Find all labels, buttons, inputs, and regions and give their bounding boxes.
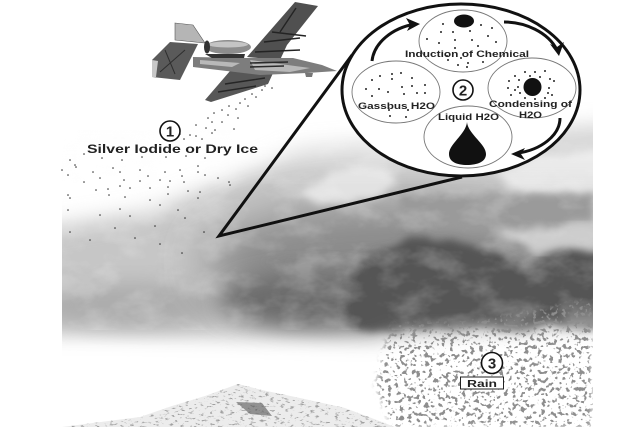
label: Condensing of [489, 99, 573, 110]
mountain [64, 384, 394, 427]
cycle arrow: top left [372, 18, 420, 61]
label: Induction of Chemical [405, 49, 529, 60]
step 1 number [160, 121, 180, 141]
fuselage [193, 57, 337, 75]
label: rain [460, 377, 504, 390]
label: Gassbus H2O [358, 101, 435, 112]
cycle arrow: top right [504, 22, 564, 56]
vertical tail [175, 23, 205, 43]
seeding particles [62, 82, 272, 253]
step 2 number: 2 [459, 82, 467, 100]
label: Liquid H2O [438, 112, 499, 123]
circle: induction of chemical [405, 10, 529, 72]
upper wing [247, 2, 318, 60]
label: silver iodide or dry ice: Silver Iodide or Dry Ice [87, 142, 258, 156]
lower wing [205, 71, 274, 102]
callout pointer [219, 55, 462, 236]
plane [152, 2, 337, 102]
circle: condensing [488, 58, 576, 121]
tailplane [152, 42, 198, 80]
label: rain: Rain [467, 378, 497, 390]
circle: liquid water [424, 106, 512, 168]
storm cloud [62, 117, 593, 351]
step 3 number: 3 [488, 356, 496, 372]
step 3 number [482, 352, 502, 374]
cycle arrow: bottom right [511, 118, 560, 160]
engine [205, 40, 251, 54]
rain [370, 290, 593, 427]
magnifier panel [342, 4, 580, 176]
label: H2O [519, 110, 542, 121]
step 1 number: 1 [166, 124, 174, 140]
circle: gaseous water [352, 61, 440, 123]
step 2 number [453, 80, 473, 100]
